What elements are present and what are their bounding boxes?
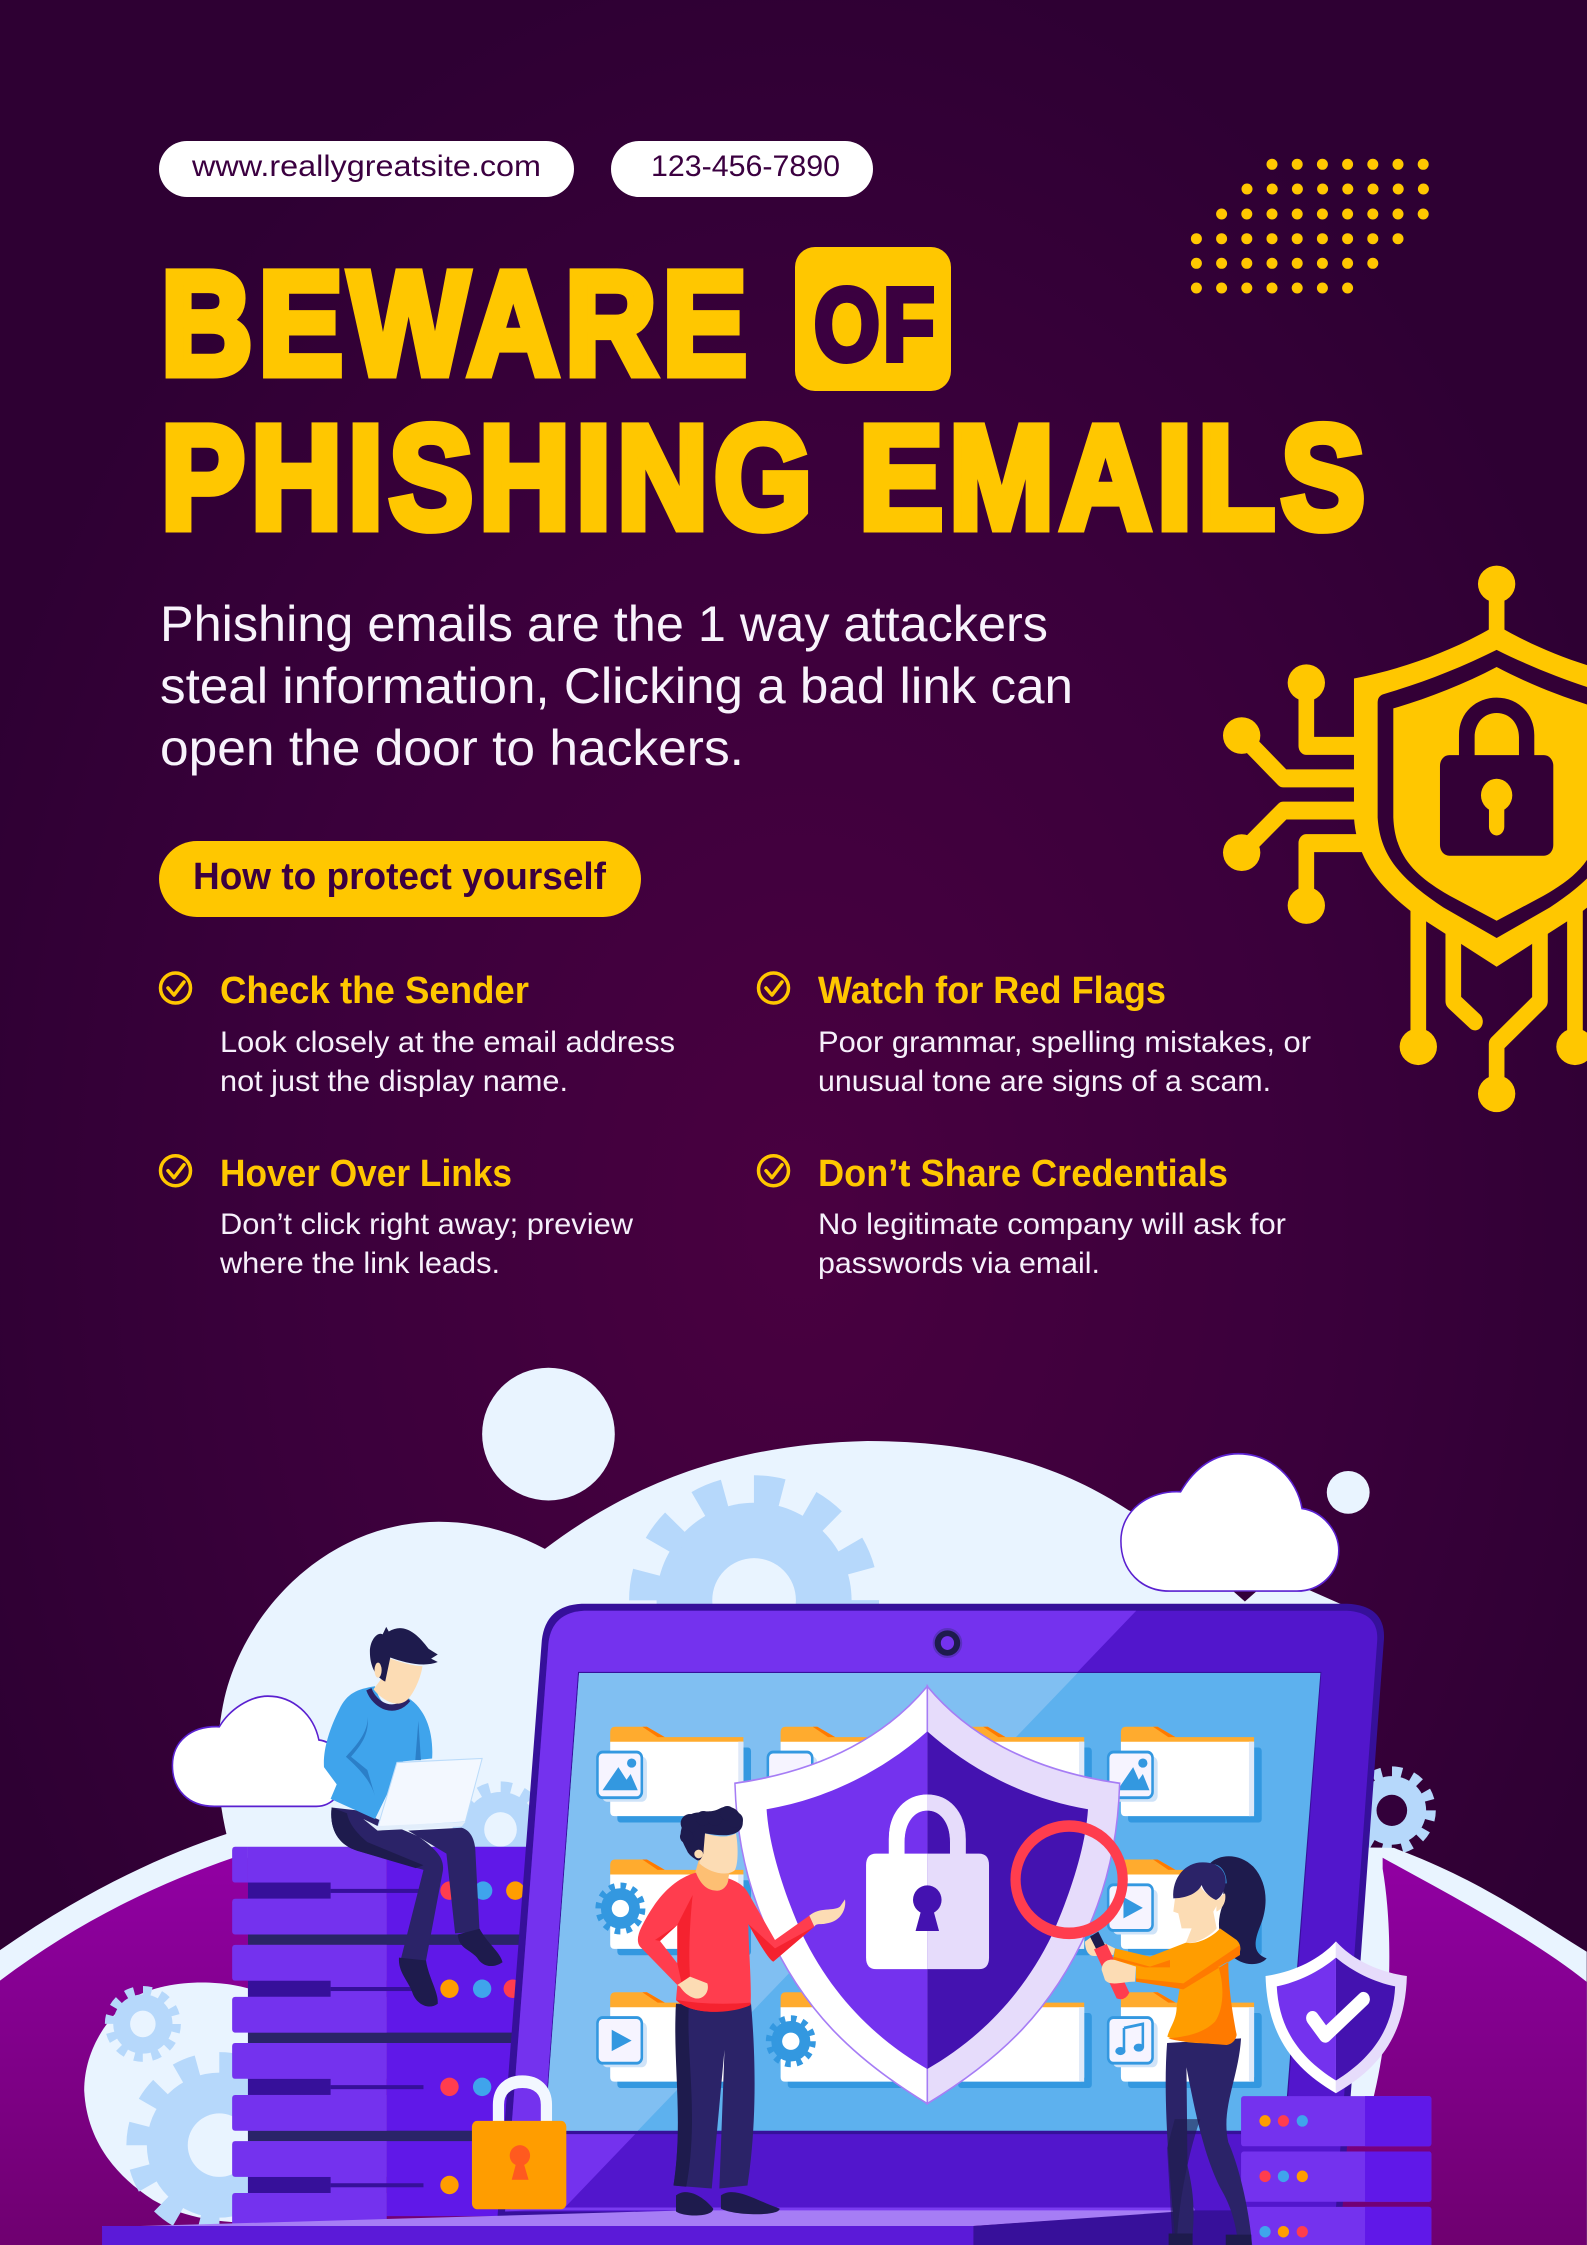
file type badges [597, 1752, 1158, 2067]
gears left [110, 1991, 299, 2225]
tip: don't share credentials [758, 1153, 1286, 1280]
website pill: www.reallygreatsite.com [191, 150, 541, 183]
tip: check the sender: Check the Sender [220, 970, 529, 1012]
cloud backdrop [218, 1441, 1357, 1859]
intro paragraph: steal information, Clicking a bad link can [160, 658, 1073, 714]
website pill [159, 141, 574, 197]
laptop [497, 1604, 1384, 2217]
intro paragraph: open the door to hackers. [160, 720, 744, 776]
server rack left [232, 1847, 535, 2226]
tip: watch for red flags [758, 970, 1311, 1098]
hill [0, 1832, 1587, 2245]
section pill: How to protect yourself [193, 856, 606, 898]
tip: watch for red flags: unusual tone are signs of a scam. [818, 1065, 1271, 1098]
tip: hover over links: Hover Over Links [220, 1153, 512, 1195]
phone pill [611, 141, 873, 197]
tip: watch for red flags: Watch for Red Flags [818, 970, 1166, 1012]
tip: check the sender [160, 970, 675, 1098]
tip: watch for red flags: Poor grammar, spelling mistakes, or [818, 1026, 1311, 1059]
large security shield [735, 1686, 1120, 2104]
laptop base [102, 2207, 1378, 2245]
phone pill: 123-456-7890 [651, 150, 840, 183]
gear behind man [459, 1788, 542, 1871]
cloud left [172, 1696, 344, 1806]
gear right of laptop [1354, 1773, 1430, 1848]
person with magnifying glass [1085, 1856, 1267, 2245]
title: PHISHING EMAILS [161, 396, 1371, 560]
small backdrop blob [84, 1982, 265, 2223]
intro paragraph [160, 596, 1073, 776]
folders on screen [610, 1727, 1262, 2088]
server stack right [1241, 2096, 1431, 2245]
tip: check the sender: Look closely at the email address [220, 1026, 675, 1059]
section pill [159, 841, 641, 917]
tip: hover over links: Don’t click right away; preview [220, 1208, 633, 1241]
tip: hover over links: where the link leads. [219, 1247, 500, 1280]
person in red sweater [638, 1806, 845, 2216]
tip: check the sender: not just the display name. [220, 1065, 568, 1098]
icon: circuit shield with lock [1223, 566, 1587, 1112]
illustration: cyber security scene [0, 1368, 1587, 2245]
decorative circle large [482, 1368, 615, 1500]
title: BEWARE [161, 242, 753, 406]
magnifying glass [1016, 1826, 1123, 1933]
tip: don't share credentials: Don’t Share Credentials [818, 1153, 1228, 1195]
title: OF [814, 267, 938, 382]
padlock orange [472, 2082, 566, 2209]
tip: don't share credentials: passwords via email. [818, 1247, 1100, 1280]
dot pattern [1196, 164, 1426, 288]
cloud right [1121, 1454, 1339, 1601]
title [161, 242, 1371, 560]
tip: don't share credentials: No legitimate company will ask for [818, 1208, 1286, 1241]
intro paragraph: Phishing emails are the 1 way attackers [160, 596, 1048, 652]
tip: hover over links [160, 1153, 633, 1280]
person sitting with laptop [324, 1627, 503, 2007]
gear behind laptop [647, 1493, 862, 1708]
small check shield [1266, 1941, 1407, 2093]
decorative circle small [1327, 1471, 1370, 1514]
